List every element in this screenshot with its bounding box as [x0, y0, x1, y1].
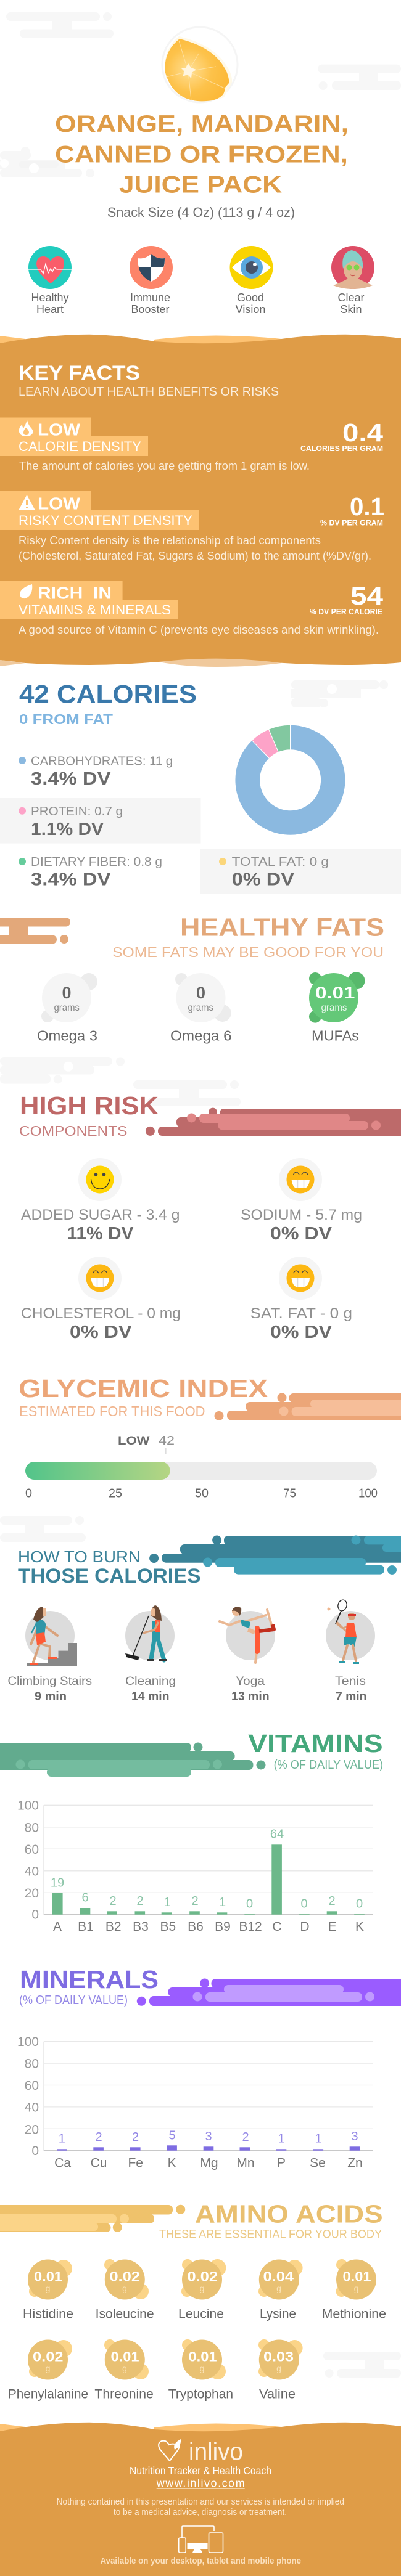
bar chart: vitamins: 0: [300, 1897, 308, 1911]
legend: total fat: TOTAL FAT: 0 g: [232, 855, 329, 869]
fact: risky content density: (Cholesterol, Saturated Fat, Sugars & Sodium) to the amount (%DV/gr).: [19, 550, 371, 562]
amino: threonine: 0.01: [111, 2349, 139, 2364]
title: ORANGE, MANDARIN,: [55, 111, 349, 137]
heading: minerals: MINERALS: [20, 1965, 159, 1994]
bar chart: vitamins: 0: [246, 1897, 253, 1911]
subheading: essential: THESE ARE ESSENTIAL FOR YOUR BODY: [159, 2228, 382, 2241]
legend: protein: PROTEIN: 0.7 g: [31, 805, 123, 818]
bar chart: minerals: 2: [95, 2130, 102, 2144]
link: website: www.inlivo.com: [156, 2477, 245, 2490]
bar chart: minerals: Cu: [91, 2156, 107, 2170]
stat: omega 3: [37, 973, 97, 1044]
item: saturated fat: SAT. FAT - 0 g: [250, 1305, 352, 1322]
bar chart: vitamins: 6: [81, 1891, 89, 1905]
amino: tryptophan: g: [200, 2363, 204, 2373]
amino: valine: [258, 2339, 303, 2402]
amino: phenylalanine: Phenylalanine: [8, 2387, 88, 2402]
amino: histidine: g: [46, 2283, 50, 2293]
icon: devices: [179, 2526, 223, 2553]
fact: calorie density: CALORIE DENSITY: [19, 439, 141, 454]
gauge: glycemic index: [25, 1434, 378, 1501]
activity: cleaning: [125, 1605, 175, 1661]
fact: rich in vitamins and minerals: A good source of Vitamin C (prevents eye diseases and skin wrinkling).: [19, 624, 379, 636]
heading: how to burn those calories: HOW TO BURN: [18, 1549, 141, 1566]
amino: phenylalanine: 0.02: [33, 2349, 63, 2364]
banner shape: glycemic index: [215, 1393, 401, 1420]
fact: risky content density: 0.1: [350, 492, 384, 521]
bar chart: vitamins: C: [272, 1920, 282, 1934]
amino: lysine: [258, 2259, 303, 2321]
label: tennis: 7 min: [336, 1690, 366, 1703]
bar chart: minerals: Mn: [236, 2156, 255, 2170]
fact: rich in vitamins and minerals: VITAMINS & MINERALS: [19, 602, 171, 618]
banner shape: high risk: [146, 1108, 401, 1136]
label: immune booster: Immune: [130, 291, 170, 304]
amino: threonine: g: [122, 2363, 127, 2373]
heading: 42 calories: 42 CALORIES: [19, 680, 197, 709]
amino: isoleucine: Isoleucine: [96, 2307, 154, 2321]
bar chart: vitamins: B5: [160, 1920, 176, 1934]
stat: omega 6: Omega 6: [170, 1028, 232, 1044]
icon: flame: [19, 420, 33, 436]
fact: risky content density: % DV PER GRAM: [320, 518, 383, 528]
gauge: glycemic index: 25: [109, 1487, 122, 1501]
bar chart: minerals: Zn: [347, 2156, 363, 2170]
legend: dietary fiber: DIETARY FIBER: 0.8 g: [31, 855, 162, 869]
label: yoga: 13 min: [231, 1690, 270, 1703]
bar chart: vitamins: 64: [270, 1828, 284, 1841]
fact: calorie density: CALORIES PER GRAM: [300, 444, 383, 453]
amino: leucine: 0.02: [188, 2268, 218, 2284]
heading: high risk: HIGH RISK: [20, 1091, 159, 1120]
icon: leaf: [20, 584, 32, 598]
heading: glycemic index: GLYCEMIC INDEX: [19, 1374, 268, 1403]
amino: methionine: 0.01: [343, 2268, 371, 2284]
heading: healthy fats: HEALTHY FATS: [180, 913, 384, 942]
amino: valine: Valine: [259, 2387, 296, 2402]
bar chart: vitamins: 2: [136, 1894, 144, 1908]
label: clear skin: Skin: [340, 303, 362, 316]
stat: MUFAs: [309, 972, 365, 1044]
bar chart: minerals: Fe: [128, 2156, 143, 2170]
label: good vision: [236, 291, 265, 316]
stat: MUFAs: 0.01: [315, 984, 355, 1002]
fact: calorie density: 0.4: [342, 418, 383, 447]
amino: tryptophan: Tryptophan: [168, 2387, 233, 2402]
fact: rich in vitamins and minerals: RICH IN: [38, 583, 112, 602]
fact: rich in vitamins and minerals: 54: [350, 582, 383, 610]
bar chart: minerals: 2: [132, 2130, 139, 2144]
bar chart: vitamins: 40: [25, 1865, 39, 1879]
subheading: estimated: ESTIMATED FOR THIS FOOD: [19, 1403, 205, 1419]
icon: healthy heart: [28, 246, 72, 289]
bar chart: minerals: 20: [25, 2122, 39, 2137]
fact: calorie density: LOW: [38, 420, 81, 439]
amino: leucine: Leucine: [178, 2307, 224, 2321]
legend: protein: [0, 798, 201, 844]
bar chart: minerals: 2: [242, 2130, 249, 2144]
amino: leucine: [178, 2259, 226, 2321]
heading: vitamins: VITAMINS: [248, 1729, 383, 1758]
activity: climbing stairs: [25, 1607, 77, 1666]
fact: risky content density: LOW: [38, 494, 81, 513]
subheading: components: COMPONENTS: [19, 1123, 127, 1139]
bar chart: vitamins: B2: [105, 1920, 122, 1934]
legend: dietary fiber: 3.4% DV: [31, 870, 111, 889]
bar chart: vitamins: B6: [188, 1920, 204, 1934]
bar chart: vitamins: 2: [191, 1894, 199, 1908]
amino: phenylalanine: [8, 2339, 88, 2402]
amino: tryptophan: [168, 2339, 233, 2402]
legend: dietary fiber: [19, 855, 162, 889]
bar chart: vitamins: 2: [109, 1894, 117, 1908]
bar chart: vitamins: 1: [163, 1896, 171, 1909]
activity: yoga: [220, 1607, 275, 1663]
amino: threonine: [94, 2339, 154, 2402]
bar chart: vitamins: K: [355, 1920, 364, 1934]
legend: carbohydrates: 3.4% DV: [31, 769, 111, 789]
item: saturated fat: [250, 1257, 352, 1342]
label: tennis: [335, 1675, 366, 1703]
legend: total fat: 0% DV: [232, 870, 295, 889]
amino: methionine: [322, 2259, 386, 2321]
fact: calorie density: The amount of calories you are getting from 1 gram is low.: [19, 460, 310, 472]
bar chart: minerals: 40: [25, 2101, 39, 2115]
bar chart: vitamins: 1: [219, 1896, 226, 1909]
fact: risky content density: RISKY CONTENT DENSITY: [19, 513, 192, 528]
item: cholesterol: 0% DV: [70, 1323, 132, 1342]
gauge: glycemic index: 75: [283, 1487, 296, 1501]
bar chart: vitamins: E: [328, 1920, 337, 1934]
amino: methionine: Methionine: [322, 2307, 386, 2321]
item: added sugar: ADDED SUGAR - 3.4 g: [21, 1207, 180, 1223]
fact: risky content density: [0, 491, 384, 562]
item: cholesterol: CHOLESTEROL - 0 mg: [21, 1305, 181, 1322]
bar chart: minerals: 100: [17, 2035, 39, 2049]
icon: clear skin: [331, 246, 374, 289]
subheading: percent of daily value: (% OF DAILY VALUE): [274, 1758, 383, 1772]
legend: carbohydrates: CARBOHYDRATES: 11 g: [31, 754, 173, 768]
label: healthy heart: Healthy: [31, 291, 69, 304]
amino: valine: 0.03: [263, 2349, 294, 2364]
legend: total fat: [200, 849, 401, 894]
heading: how to burn those calories: THOSE CALORIES: [18, 1565, 201, 1587]
stat: MUFAs: MUFAs: [312, 1028, 359, 1044]
bar chart: vitamins: 20: [25, 1886, 39, 1901]
amino: leucine: g: [200, 2283, 204, 2293]
subtitle: serving size: Snack Size (4 Oz) (113 g / 4 oz): [107, 205, 295, 220]
bar chart: vitamins: 60: [25, 1843, 39, 1857]
icon: warning triangle: [19, 495, 35, 510]
stat: omega 6: [170, 973, 232, 1044]
label: clear skin: Clear: [337, 291, 365, 304]
item: added sugar: 11% DV: [67, 1224, 134, 1244]
bar chart: vitamins: 80: [25, 1821, 39, 1835]
bar chart: minerals: Ca: [54, 2156, 71, 2170]
amino: phenylalanine: g: [46, 2363, 50, 2373]
bar chart: vitamins: B9: [215, 1920, 231, 1934]
item: sodium: 0% DV: [270, 1224, 333, 1244]
bar chart: vitamins: D: [300, 1920, 310, 1934]
stat: omega 3: Omega 3: [37, 1028, 97, 1044]
bar chart: minerals: 3: [205, 2130, 212, 2143]
icon: orange slice: [162, 27, 238, 102]
gauge: glycemic index: 42: [159, 1434, 175, 1448]
amino: lysine: g: [276, 2283, 281, 2293]
item: added sugar: [21, 1158, 180, 1244]
label: cleaning: Cleaning: [125, 1675, 176, 1688]
fact: rich in vitamins and minerals: % DV PER CALORIE: [310, 607, 382, 616]
amino: lysine: 0.04: [263, 2268, 294, 2284]
fact: rich in vitamins and minerals: [0, 581, 383, 636]
bar chart: minerals: 80: [25, 2057, 39, 2071]
bar chart: minerals: 3: [351, 2130, 358, 2143]
amino: methionine: g: [354, 2283, 358, 2293]
bar chart: vitamins: 2: [328, 1894, 336, 1908]
logo: inlivo: [159, 2439, 243, 2466]
amino: valine: g: [276, 2363, 281, 2373]
bar chart: minerals: 1: [278, 2132, 285, 2146]
text: disclaimer: Nothing contained in this presentation and our services is intended or implied: [57, 2497, 344, 2507]
subheading: percent of daily value: (% OF DAILY VALUE): [19, 1994, 128, 2007]
bar chart: minerals: 5: [168, 2129, 176, 2143]
text: disclaimer: to be a medical advice, diagnosis or treatment.: [114, 2507, 287, 2517]
gauge: glycemic index: 50: [195, 1487, 209, 1501]
banner shape: amino acids: [0, 2205, 185, 2232]
subheading: healthy fats: SOME FATS MAY BE GOOD FOR YOU: [112, 944, 384, 960]
bar chart: minerals: K: [168, 2156, 176, 2170]
text: tagline: Nutrition Tracker & Health Coach: [130, 2464, 271, 2477]
bar chart: minerals: 60: [25, 2079, 39, 2093]
bar chart: vitamins: A: [53, 1920, 62, 1934]
bar chart: vitamins: 100: [17, 1799, 39, 1813]
bar chart: vitamins: [17, 1799, 373, 1934]
amino: isoleucine: 0.02: [110, 2268, 140, 2284]
item: saturated fat: 0% DV: [270, 1323, 333, 1342]
amino: threonine: Threonine: [94, 2387, 154, 2402]
title: [55, 111, 349, 198]
bar chart: vitamins: 0: [31, 1908, 39, 1922]
gauge: glycemic index: LOW: [118, 1434, 150, 1448]
label: cleaning: [125, 1675, 176, 1703]
label: climbing stairs: Climbing Stairs: [7, 1675, 92, 1688]
amino: histidine: Histidine: [23, 2307, 73, 2321]
label: immune booster: [130, 291, 170, 316]
label: healthy heart: [31, 291, 69, 316]
label: yoga: [231, 1675, 270, 1703]
title: JUICE PACK: [119, 171, 282, 198]
bar chart: minerals: [17, 2035, 373, 2170]
banner shape: minerals: [137, 1978, 401, 2006]
label: yoga: Yoga: [236, 1675, 265, 1688]
activity: tennis: [326, 1599, 375, 1664]
logo: inlivo: inlivo: [189, 2439, 243, 2466]
bar chart: minerals: 0: [31, 2144, 39, 2158]
bar chart: vitamins: B3: [133, 1920, 149, 1934]
stat: omega 6: grams: [188, 1003, 213, 1013]
heading: amino acids: AMINO ACIDS: [195, 2200, 383, 2228]
fact: calorie density: [0, 418, 383, 472]
item: sodium: SODIUM - 5.7 mg: [241, 1207, 362, 1223]
item: cholesterol: [21, 1257, 181, 1342]
bar chart: vitamins: 19: [51, 1877, 64, 1890]
label: healthy heart: Heart: [36, 303, 64, 316]
stat: omega 3: 0: [62, 984, 72, 1002]
amino: histidine: [23, 2259, 73, 2321]
amino: isoleucine: g: [122, 2283, 127, 2293]
label: tennis: Tenis: [335, 1675, 366, 1688]
banner shape: vitamins: [0, 1743, 265, 1777]
bar chart: vitamins: B1: [78, 1920, 94, 1934]
label: clear skin: [337, 291, 365, 316]
footer: [0, 2423, 401, 2576]
heading: key facts: KEY FACTS: [19, 362, 140, 384]
label: cleaning: 14 min: [131, 1690, 169, 1703]
stat: omega 3: grams: [54, 1003, 80, 1013]
text: disclaimer: [57, 2497, 344, 2517]
subheading: LEARN ABOUT HEALTH BENEFITS OR RISKS: [19, 385, 279, 399]
bar chart: minerals: Se: [310, 2156, 326, 2170]
label: immune booster: Booster: [131, 303, 170, 316]
banner shape: healthy fats: [0, 918, 70, 944]
label: climbing stairs: 9 min: [35, 1690, 67, 1703]
icon: good vision: [229, 246, 273, 289]
amino: isoleucine: [96, 2259, 154, 2321]
bar chart: minerals: Mg: [200, 2156, 218, 2170]
legend: protein: 1.1% DV: [31, 820, 104, 839]
panel: key facts: [0, 335, 401, 667]
banner shape: burn calories: [149, 1536, 401, 1575]
label: good vision: Good: [237, 291, 264, 304]
text: availability: Available on your desktop, tablet and mobile phone: [100, 2556, 301, 2566]
amino: histidine: 0.01: [34, 2268, 62, 2284]
bar chart: minerals: 1: [59, 2132, 65, 2146]
gauge: glycemic index: 0: [25, 1487, 32, 1501]
legend: carbohydrates: [19, 754, 173, 789]
bar chart: minerals: 1: [315, 2132, 322, 2146]
bar chart: vitamins: 0: [356, 1897, 363, 1911]
label: climbing stairs: [7, 1675, 92, 1703]
bar chart: vitamins: B12: [239, 1920, 262, 1934]
donut chart: calorie breakdown: [235, 725, 345, 835]
stat: omega 6: 0: [196, 984, 205, 1002]
gauge: glycemic index: 100: [358, 1487, 378, 1501]
title: CANNED OR FROZEN,: [55, 142, 348, 168]
amino: lysine: Lysine: [260, 2307, 296, 2321]
label: good vision: Vision: [236, 303, 265, 316]
icon: immune booster: [130, 246, 173, 289]
item: sodium: [241, 1158, 362, 1244]
fact: risky content density: Risky Content density is the relationship of bad components: [19, 534, 321, 547]
subheading: 0 from fat: 0 FROM FAT: [19, 711, 113, 727]
amino: tryptophan: 0.01: [189, 2349, 217, 2364]
heading: how to burn those calories: [18, 1549, 201, 1587]
stat: MUFAs: grams: [321, 1003, 347, 1013]
bar chart: minerals: P: [277, 2156, 286, 2170]
